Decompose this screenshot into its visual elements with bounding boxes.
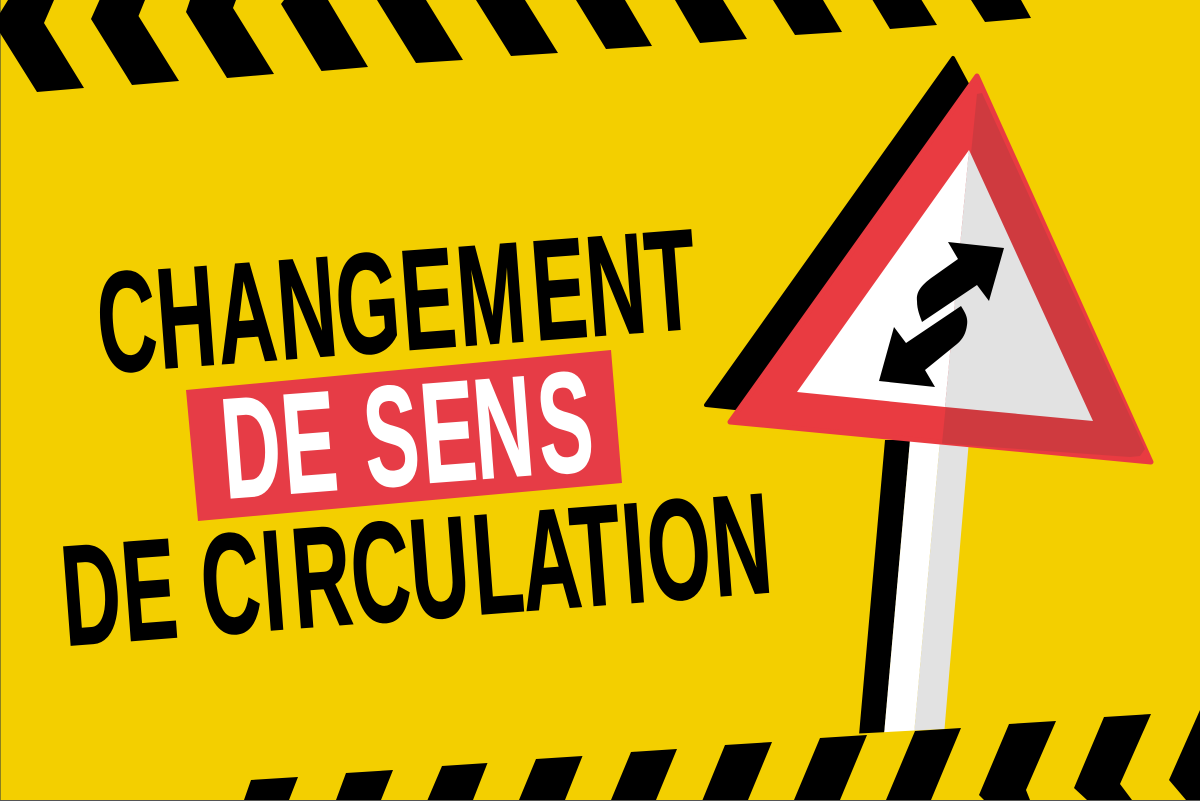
sign red border [730,76,1151,462]
ground band [859,728,961,800]
title line 3: DE CIRCULATION [56,463,777,676]
top hazard stripes [0,0,1031,92]
road sign post [859,440,969,735]
sign border shaded side [942,93,1145,457]
sign grey panel [945,150,1093,421]
bottom hazard stripes [244,710,1200,800]
sign white panel [797,150,969,407]
title line 2: DE SENS [216,341,598,529]
highlighted banner [186,341,622,529]
icon: two-way arrows [879,242,1004,387]
road sign triangle [706,58,1151,462]
title line 1: CHANGEMENT [92,199,701,404]
sign shadow [706,58,968,408]
banner background [186,350,622,521]
